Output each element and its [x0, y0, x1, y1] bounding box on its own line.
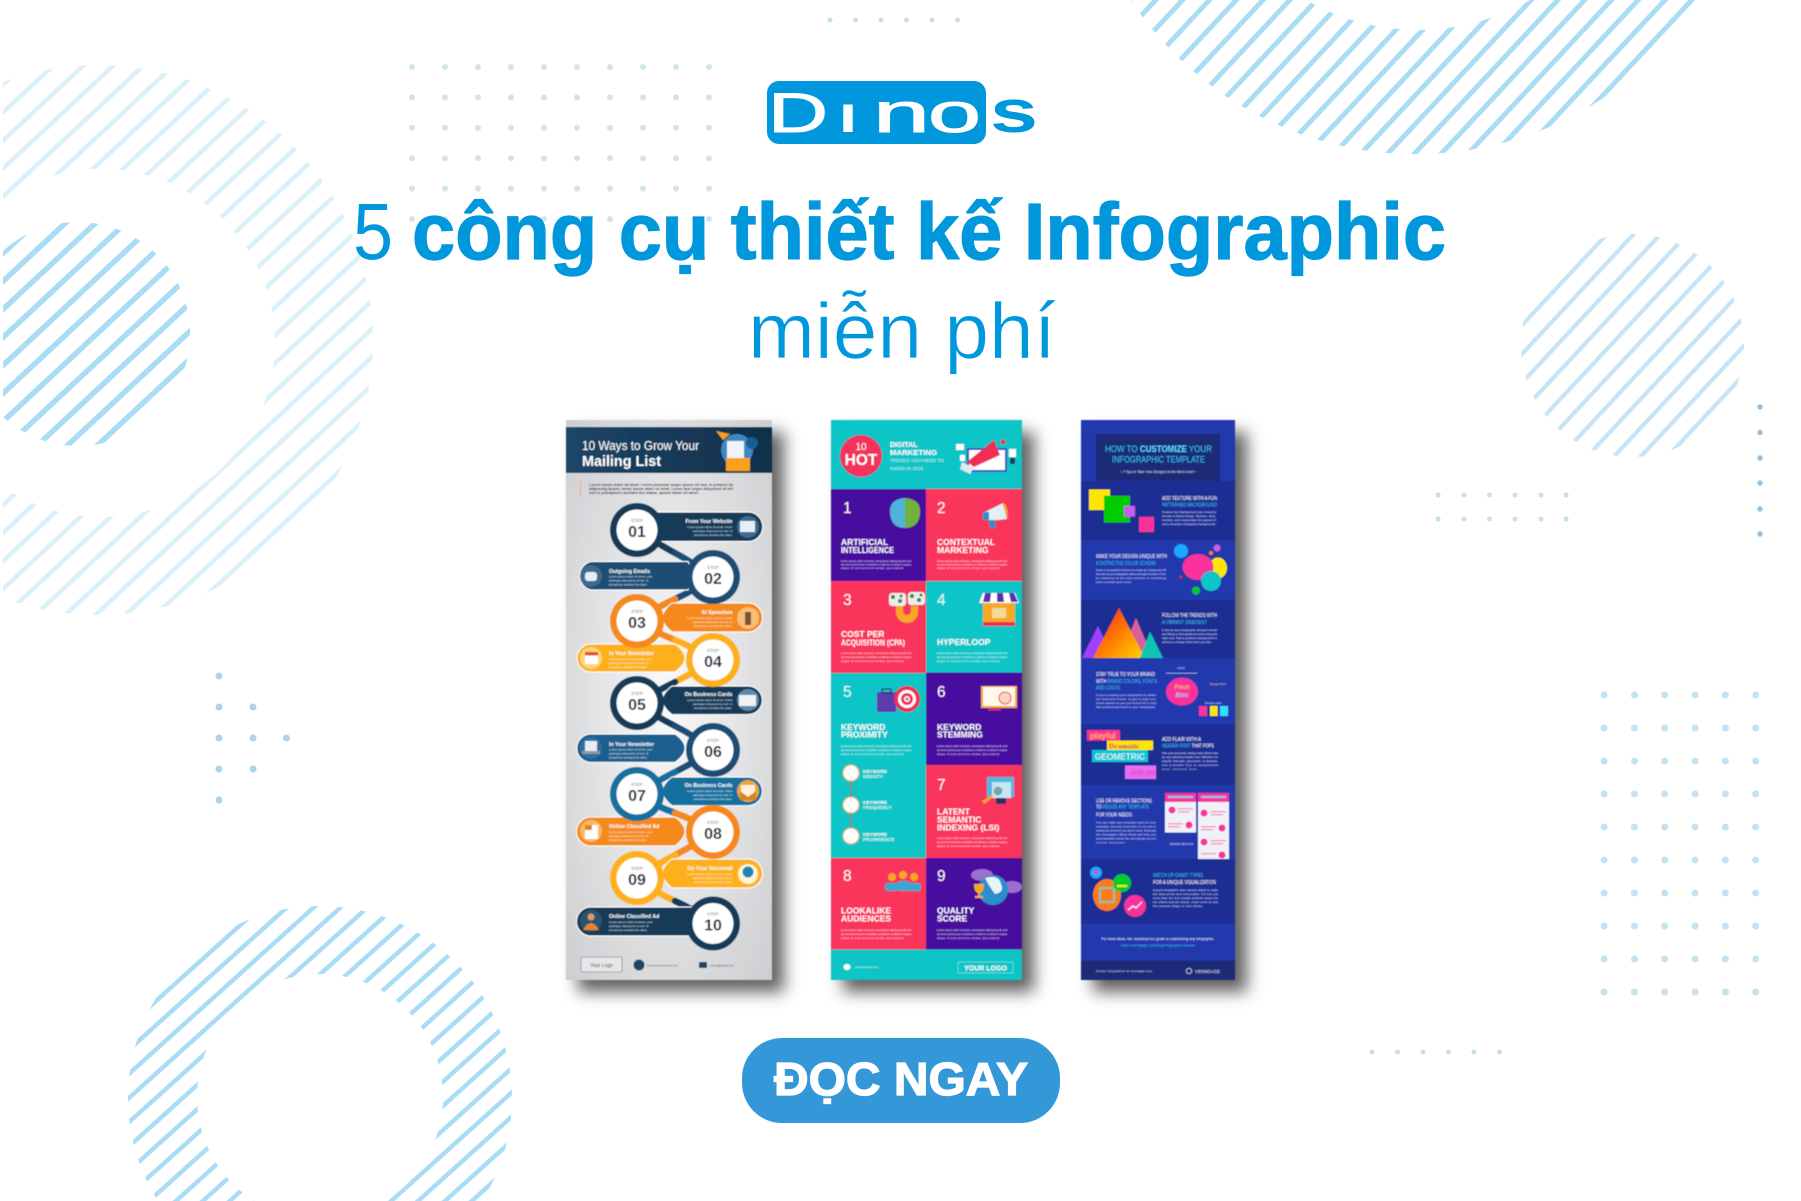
title line 1: 5 — [353, 187, 393, 276]
section 3: gradient mountains: are fitting to find gradients and using just — [1162, 632, 1217, 636]
section 7: chart types: A good infographic uses various charts to make — [1153, 888, 1218, 892]
section 4: brand colors: WITH BRAND COLORS, FONTS, — [1096, 679, 1158, 685]
step pill 4: phosphore aveliant the diam. — [609, 665, 648, 669]
cell 4: hyperloop: aliqua. Ut enim ad minim veniam, quis nostrud — [937, 659, 1000, 663]
section 6: resize sections: the Venngage's Move Mode will help you — [1096, 832, 1156, 836]
section 4: brand colors: that professional touch to your infographic. — [1096, 705, 1156, 709]
section 5: header fonts: your second font. — [1162, 767, 1198, 771]
section 6: resize sections — [1096, 793, 1229, 859]
step circle 06: 06 — [704, 744, 722, 761]
section 2: color scheme: MAKE YOUR DESIGN UNIQUE WITH — [1096, 554, 1167, 560]
cell 8: lookalike audiences: aliqua. Ut enim ad minim veniam, quis nostrud — [841, 936, 904, 940]
cell 2: contextual marketing: Lorem ipsum dolor sit amet, consectetur adipiscing elit sed — [937, 559, 1008, 563]
background pattern: top-right striped ring — [1075, 0, 1757, 154]
section 3: gradient mountains: FOLLOW THE TRENDS WITH — [1162, 613, 1217, 619]
section 3: gradient mountains: It seems any infographic designs trends — [1162, 628, 1218, 632]
section 4: brand colors: brand assets so you put brand full in and — [1096, 701, 1156, 705]
cell 5: keyword proximity: PROXIMITY — [841, 730, 888, 740]
step pill 2: Outgoing Emails — [609, 569, 650, 575]
panel 1 intro text — [580, 481, 734, 496]
section 1: pattern background: A patterned background can instantly — [1162, 510, 1217, 514]
panel 2 header: MARKETING — [890, 450, 938, 457]
step pill 2: phosphore aveliant the diam. — [609, 582, 648, 586]
section 2: color scheme: the rest of your infographic with a strength of colors. From — [1096, 572, 1167, 576]
cell 5: keyword proximity: KEYWORD — [863, 800, 888, 805]
cell 7: latent semantic indexing: do eiusmod tempor incididunt ut labore et dolore magna — [937, 840, 1008, 844]
cell 3: cost per acquisition: 3 — [843, 592, 852, 609]
section 1: pattern background — [1089, 490, 1217, 532]
cell 5: keyword proximity: DENSITY — [863, 774, 883, 779]
section 3: gradient mountains: right now. Add a gradient background to — [1162, 636, 1217, 640]
step circle 03: STEP — [631, 609, 643, 614]
section 6: resize sections: adding an element you don't need. Amongst — [1096, 828, 1156, 832]
panel 3 title block: ~ 7 Tips to Take Your Designs to the Next Level ~ — [1120, 470, 1196, 474]
cell 6: keyword stemming: aliqua. Ut enim ad minim veniam, quis nostrud — [937, 752, 1000, 756]
section 4: brand colors — [1096, 666, 1228, 716]
step pill 1: From Your Website — [686, 519, 733, 525]
cell 1: artificial intelligence — [831, 489, 926, 581]
background pattern: left striped ring — [0, 65, 373, 615]
panel 1 intro text: met in phosphore aveliant the diame, ipsum dolor sit amet. — [589, 491, 699, 495]
step pill 10 — [576, 907, 692, 936]
step pill 9: Lorem ipsum dolor sit amet. Insert — [687, 872, 733, 876]
step pill 10: phosphore aveliant the diam. — [609, 928, 648, 932]
step pill 8: phosphore aveliant the diam. — [609, 838, 648, 842]
cell 6: keyword stemming: 6 — [937, 684, 946, 701]
panel 1 footer: www.domainname.com — [647, 964, 679, 968]
dot grid: top left — [396, 52, 726, 234]
section 5: header fonts: ADD FLAIR WITH A — [1162, 737, 1202, 743]
step pill 4: In Your Newsletter — [609, 651, 654, 657]
panel 2 header — [840, 435, 1016, 477]
step circle 04: STEP — [707, 648, 719, 653]
step pill 7: Lorem ipsum dolor sit amet. Insert — [687, 789, 733, 793]
step pill 1: phosphore aveliant the diam. — [694, 533, 733, 537]
section 7: chart types: the data pretty and memorable. It's not just — [1153, 892, 1218, 896]
cell 4: hyperloop: 4 — [937, 592, 946, 609]
panel 2 footer — [844, 962, 1013, 973]
step pill 7: phosphore aveliant the diam. — [694, 797, 733, 801]
cell 1: artificial intelligence: ARTIFICIAL — [841, 537, 888, 547]
section 7: chart types: MATCH UP CHART TYPES — [1153, 873, 1204, 879]
cell 8: lookalike audiences: LOOKALIKE — [841, 906, 891, 916]
section 6: resize sections: You can make any template work for your — [1096, 820, 1156, 824]
section 6: resize sections: resize template. — [1096, 840, 1126, 844]
cell 5: keyword proximity: Lorem ipsum dolor sit amet, consectetur adipiscing elit sed — [841, 744, 912, 748]
step pill 8 — [576, 817, 685, 846]
title line 1: công cụ thiết kế Infographic — [412, 187, 1446, 276]
section 5: header fonts: Dramatic — [1109, 741, 1140, 750]
cell 9: quality score — [926, 858, 1022, 950]
section 4: brand colors: STAY TRUE TO YOUR BRAND — [1096, 672, 1155, 678]
cell 9: quality score: QUALITY — [937, 906, 975, 916]
title line 2: miễn phí — [748, 286, 1056, 375]
dot rows: right of panels — [1436, 492, 1568, 522]
cell 2: contextual marketing: do eiusmod tempor incididunt ut labore et dolore magna — [937, 562, 1008, 566]
logo: Dinos: I — [839, 97, 857, 141]
cell 5: keyword proximity: KEYWORD — [863, 832, 888, 837]
section 1: pattern background: ADD TEXTURE WITH A FUN — [1162, 496, 1217, 502]
section 5: header fonts: HEADER FONT THAT POPS — [1162, 744, 1215, 750]
cell 7: latent semantic indexing: INDEXING (LSI) — [937, 822, 1000, 832]
cell 5: keyword proximity — [841, 684, 920, 844]
cell 4: hyperloop: do eiusmod tempor incididunt ut labore et dolore magna — [937, 655, 1008, 659]
step pill 1: partingue disponent ut met. In — [693, 529, 733, 533]
section 5: header fonts — [1087, 730, 1219, 779]
step pill 3: At Speaches — [701, 610, 733, 616]
panel 1 intro text: adipiscing ipsum, lorem ipsum dolor sit amet. Lorem and seque disponent sit elit — [589, 487, 734, 491]
panel 2 header: TRENDS YOU NEED TO — [890, 458, 944, 464]
step circle 09 — [610, 851, 664, 905]
step circle 04: 04 — [704, 654, 722, 671]
step circle 07: STEP — [631, 782, 643, 787]
background pattern: right striped disc — [1521, 234, 1744, 457]
cell 6: keyword stemming: KEYWORD — [937, 722, 981, 732]
step pill 1 — [650, 512, 763, 542]
cell 7: latent semantic indexing: aliqua. Ut enim ad minim veniam, quis nostrud — [937, 844, 1000, 848]
cell 8: lookalike audiences: AUDIENCES — [841, 914, 891, 924]
cell 7: latent semantic indexing: LATENT — [937, 806, 971, 816]
panel 3 footer — [1096, 968, 1220, 974]
step circle 03 — [610, 594, 664, 648]
panel 2 header: HOT — [845, 452, 878, 469]
step circle 08: STEP — [707, 820, 719, 825]
panel 2 footer: www.domain.com — [855, 965, 879, 969]
cell 3: cost per acquisition: aliqua. Ut enim ad minim veniam, quis nostrud — [841, 659, 904, 663]
section 6: resize sections: FOR YOUR NEEDS — [1096, 812, 1133, 818]
panel: mailing list infographic — [566, 420, 772, 980]
cell 6: keyword stemming — [926, 672, 1022, 765]
panel 1 footer — [581, 957, 735, 972]
panel 3 title block — [1096, 434, 1220, 481]
panel 1 footer: Your Logo — [590, 963, 613, 969]
section 3: gradient mountains: A VIBRANT GRADIENT — [1162, 620, 1207, 626]
button: read now — [742, 1038, 1060, 1123]
cell 8: lookalike audiences: Lorem ipsum dolor sit amet, consectetur adipiscing elit sed — [841, 928, 912, 932]
panel: customize template infographic — [1081, 420, 1235, 980]
panel 3 closing text: https://venngage.com/blog/infographic-resume — [1121, 944, 1195, 948]
section 1: pattern background: every template infographic backgrounds. — [1162, 522, 1216, 526]
step pill 8: partingue disponent ut met. In — [609, 834, 649, 838]
panel 3 title block: HOW TO CUSTOMIZE YOUR — [1105, 444, 1212, 455]
step pill 5: phosphore aveliant the diam. — [694, 706, 733, 710]
step pill 5: Lorem ipsum dolor sit amet. Insert — [687, 698, 733, 702]
cell 2: contextual marketing: CONTEXTUAL — [937, 537, 995, 547]
cell 7: latent semantic indexing — [926, 765, 1022, 858]
cell 5: keyword proximity: KEYWORD — [841, 722, 885, 732]
step pill 6: partingue disponent ut met. In — [609, 752, 649, 756]
cell 1: artificial intelligence: do eiusmod tempor incididunt ut labore et dolore magna — [841, 562, 912, 566]
panel 1 intro text: Lorem ipsum dolor sit amet. Lorem personal seque ipsum sit met, in proteon sit — [589, 483, 734, 487]
step circle 10 — [686, 896, 740, 950]
section 5: header fonts: Use your personal / design style where with — [1162, 751, 1218, 755]
step circle 10: 10 — [704, 918, 722, 934]
step pill 6: In Your Newsletter — [609, 742, 654, 748]
section 6: resize sections: message, but just remember to cut out or — [1096, 824, 1156, 828]
section 6: resize sections: TO RESIZE ANY TEMPLATE — [1096, 805, 1150, 811]
cell 7: latent semantic indexing: Lorem ipsum dolor sit amet, consectetur adipiscing elit sed — [937, 836, 1008, 840]
cell 4: hyperloop: HYPERLOOP — [937, 637, 991, 647]
step circle 02: 02 — [704, 571, 722, 588]
section 4: brand colors: the business brand, forget to add your — [1096, 697, 1156, 701]
step pill 9: On Your Voicemail — [687, 866, 733, 872]
step circle 05: STEP — [631, 691, 643, 696]
cell 5: keyword proximity: KEYWORD — [863, 769, 888, 774]
cell 5: keyword proximity: aliqua. Ut enim ad minim veniam, quis nostrud — [841, 752, 904, 756]
section 4: brand colors: Bites — [1175, 693, 1189, 699]
step pill 5: On Business Cards — [685, 692, 733, 698]
section 7: chart types: more than the tool visuals website space the — [1153, 896, 1218, 900]
section 2: color scheme: Color is a powerful element to create an impact and fill — [1096, 568, 1166, 572]
step circle 01: 01 — [628, 524, 646, 541]
step pill 1: Lorem ipsum dolor sit amet. Insert — [687, 525, 733, 529]
step pill 8: Online Classified Ad — [609, 824, 659, 830]
step pill 6: Lorem ipsum dolor sit amet, your — [609, 748, 653, 752]
panel shadows — [578, 432, 1247, 992]
section bands — [1081, 481, 1235, 980]
step pill 4: Lorem ipsum dolor sit amet, your — [609, 657, 653, 661]
section 5: header fonts: use a header font to complement — [1162, 763, 1218, 767]
cell 5: keyword proximity: 5 — [843, 684, 852, 701]
panel 3 closing text — [1102, 937, 1215, 948]
step pill 10: partingue disponent ut met. In — [609, 924, 649, 928]
step pill 5: partingue disponent ut met. In — [693, 702, 733, 706]
dot row: top centre — [828, 18, 960, 22]
step pill 8: Lorem ipsum dolor sit amet, your — [609, 830, 653, 834]
step pill 3 — [662, 603, 762, 632]
section 4: brand colors: Primary colors — [1205, 701, 1222, 705]
step pill 10: Lorem ipsum dolor sit amet, your — [609, 920, 653, 924]
section 2: color scheme — [1096, 544, 1227, 595]
cell 9: quality score: aliqua. Ut enim ad minim veniam, quis nostrud — [937, 936, 1000, 940]
step pill 3: Lorem ipsum dolor sit amet. Insert — [687, 616, 733, 620]
section 4: brand colors: AND LOGOS — [1096, 686, 1121, 692]
section 1: pattern background: multiply, and manipulate the appeal of — [1162, 518, 1216, 522]
panel 3 footer: Create infographics at venngage.com — [1096, 969, 1153, 973]
cell 8: lookalike audiences: do eiusmod tempor incididunt ut labore et dolore magna — [841, 932, 912, 936]
cell 9: quality score: SCORE — [937, 914, 968, 924]
section 6: resize sections: RESIZE SECTION — [1170, 842, 1193, 846]
cell 9: quality score: do eiusmod tempor incididunt ut labore et dolore magna — [937, 932, 1008, 936]
step circle 01: STEP — [631, 518, 643, 523]
section 6: resize sections: USE OR REMOVE SECTIONS — [1096, 799, 1153, 805]
cell 3: cost per acquisition: ACQUISITION (CPA) — [841, 638, 905, 648]
panel 1 header — [566, 427, 772, 473]
logo: Dinos — [767, 78, 1038, 145]
cell 3: cost per acquisition: Lorem ipsum dolor sit amet, consectetur adipiscing elit sed — [841, 651, 912, 655]
section 2: color scheme: A DISTINCTIVE COLOR SCHEME — [1096, 561, 1157, 567]
panel 2 footer: YOUR LOGO — [964, 966, 1007, 972]
panel 3 closing text: For more ideas, full, download our guide to customizing any infographic. — [1102, 937, 1215, 941]
step circle 08: 08 — [704, 826, 722, 843]
panel 1 connectors — [637, 530, 713, 923]
step circle 03: 03 — [628, 615, 646, 632]
cell 6: keyword stemming: do eiusmod tempor incididunt ut labore et dolore magna — [937, 748, 1008, 752]
background pattern: bottom-left striped ring — [128, 906, 512, 1201]
section 5: header fonts: playful, dramatic, geometric, or delicate, — [1162, 759, 1218, 763]
panel 1 header: Mailing List — [582, 454, 661, 470]
panel: digital marketing infographic — [831, 420, 1022, 980]
step circle 07: 07 — [628, 788, 646, 805]
section 1: pattern background: PATTERNED BACKGROUND — [1162, 502, 1217, 508]
section 5: header fonts: GEOMETRIC — [1095, 752, 1145, 762]
step pill 2: partingue disponent ut met. In — [609, 578, 649, 582]
logo: Dinos: o — [928, 81, 981, 144]
cell 6: keyword stemming: STEMMING — [937, 730, 983, 740]
step pill 3: phosphore aveliant the diam. — [694, 624, 733, 628]
cell 2: contextual marketing — [926, 489, 1022, 581]
section 1: pattern background: elevate a bland design. Browse, drop, — [1162, 514, 1216, 518]
step circle 01 — [610, 503, 664, 557]
step pill 10: Online Classified Ad — [609, 914, 659, 920]
cell 2: contextual marketing: MARKETING — [937, 545, 989, 555]
cell 3: cost per acquisition: do eiusmod tempor incididunt ut labore et dolore magna — [841, 655, 912, 659]
step circle 08 — [686, 805, 740, 859]
step circle 06 — [686, 723, 740, 777]
panel 2 header: 10 — [855, 442, 867, 453]
step circle 09: 09 — [628, 872, 646, 889]
step pill 5 — [662, 686, 762, 715]
step pill 6 — [577, 734, 685, 762]
step circle 09: STEP — [631, 866, 643, 871]
step circle 05: 05 — [628, 697, 646, 714]
dot row: bottom right — [1370, 1050, 1502, 1054]
dot grid: bottom right — [1589, 678, 1771, 1008]
section 3: gradient mountains: achieve a design that feels just like. — [1162, 640, 1212, 644]
cell 8: lookalike audiences — [831, 858, 926, 950]
section 6: resize sections: automatically resize the rest design as you — [1096, 836, 1156, 840]
logo: Dinos: n — [873, 81, 930, 144]
cell 4: hyperloop: Lorem ipsum dolor sit amet, consectetur adipiscing elit sed — [937, 651, 1008, 655]
cell 5: keyword proximity: FREQUENCY — [863, 805, 892, 810]
step pill 7: On Business Cards — [685, 783, 733, 789]
cell 5: keyword proximity: do eiusmod tempor incididunt ut labore et dolore magna — [841, 748, 912, 752]
cell 1: artificial intelligence: INTELLIGENCE — [841, 545, 894, 555]
logo: Dinos: s — [990, 78, 1038, 145]
panel 3 title block: INFOGRAPHIC TEMPLATE — [1112, 454, 1205, 466]
panel 2 header: KNOW IN 2019 — [890, 466, 923, 472]
step circle 05 — [610, 676, 664, 730]
cell 2: contextual marketing: aliqua. Ut enim ad minim veniam, quis nostrud — [937, 566, 1000, 570]
step circle 02 — [686, 550, 740, 604]
cell 1: artificial intelligence: Lorem ipsum dolor sit amet, consectetur adipiscing elit sed — [841, 559, 912, 563]
cell 3: cost per acquisition: COST PER — [841, 629, 884, 639]
step pill 6: phosphore aveliant the diam. — [609, 756, 648, 760]
dot column: far right — [1757, 404, 1763, 537]
step circle 07 — [610, 767, 664, 821]
step pill 2 — [580, 562, 692, 590]
section 2: color scheme: bold contrast and tones. — [1096, 580, 1132, 584]
cell 3: cost per acquisition — [831, 581, 926, 673]
cell 9: quality score: 9 — [937, 868, 946, 885]
step pill 7: partingue disponent ut met. In — [693, 793, 733, 797]
section 5: header fonts: delicate — [1130, 768, 1156, 777]
section 4: brand colors: LOGO — [1177, 666, 1185, 670]
step pill 3: partingue disponent ut met. In — [693, 620, 733, 624]
panel 3 footer: VENNGAGE — [1195, 969, 1220, 974]
step pill 9: phosphore aveliant the diam. — [694, 880, 733, 884]
step circle 04 — [686, 633, 740, 687]
section 4: brand colors: Fresh — [1174, 685, 1190, 691]
section 3: gradient mountains — [1082, 608, 1218, 658]
section 4: brand colors: If you're creating your infographic to market — [1096, 693, 1156, 697]
cell 5: keyword proximity: PROMINENCE — [863, 837, 894, 842]
step pill 9: partingue disponent ut met. In — [693, 876, 733, 880]
section 7: chart types — [1090, 867, 1218, 917]
step pill 9 — [662, 859, 762, 888]
cell 2: contextual marketing: 2 — [937, 500, 946, 517]
panel 2 header: DIGITAL — [890, 442, 918, 449]
step pill 7 — [662, 777, 762, 806]
section 7: chart types: FOR A UNIQUE VISUALIZATION — [1153, 880, 1216, 886]
cell 8: lookalike audiences: 8 — [843, 868, 852, 885]
section 4: brand colors: Bungee Font — [1210, 682, 1226, 686]
cell 1: artificial intelligence: 1 — [843, 500, 852, 517]
section 5: header fonts: playful — [1090, 732, 1116, 740]
logo: Dinos: D — [768, 81, 828, 144]
cell 6: keyword stemming: Lorem ipsum dolor sit amet, consectetur adipiscing elit sed — [937, 744, 1008, 748]
cell 1: artificial intelligence: aliqua. Ut enim ad minim veniam, quis nostrud — [841, 566, 904, 570]
panel 1 footer: name@gmail.com — [710, 964, 735, 968]
step pill 4 — [577, 644, 685, 672]
step circle 02: STEP — [707, 565, 719, 570]
button: read now: ĐỌC NGAY — [774, 1053, 1028, 1105]
section 7: chart types: bar charts and pie charts, much more so use — [1153, 900, 1218, 904]
panel 1 header: 10 Ways to Grow Your — [582, 438, 700, 453]
cell 7: latent semantic indexing: SEMANTIC — [937, 814, 981, 824]
cell 4: hyperloop — [937, 592, 1019, 663]
dot triangle: left — [216, 672, 290, 804]
section 5: header fonts: an eye-catching header font. Whether it's — [1162, 755, 1219, 759]
section 2: color scheme: by matching up the color scheme or combining — [1096, 576, 1166, 580]
section 7: chart types: the creative shape or icon charts. — [1153, 904, 1203, 908]
step circle 10: STEP — [707, 912, 719, 916]
step pill 2: Lorem ipsum dolor sit amet, your — [609, 574, 653, 578]
step circle 06: STEP — [707, 738, 719, 743]
step pill 4: partingue disponent ut met. In — [609, 661, 649, 665]
cell 7: latent semantic indexing: 7 — [937, 777, 946, 794]
cell 9: quality score: Lorem ipsum dolor sit amet, consectetur adipiscing elit sed — [937, 928, 1008, 932]
